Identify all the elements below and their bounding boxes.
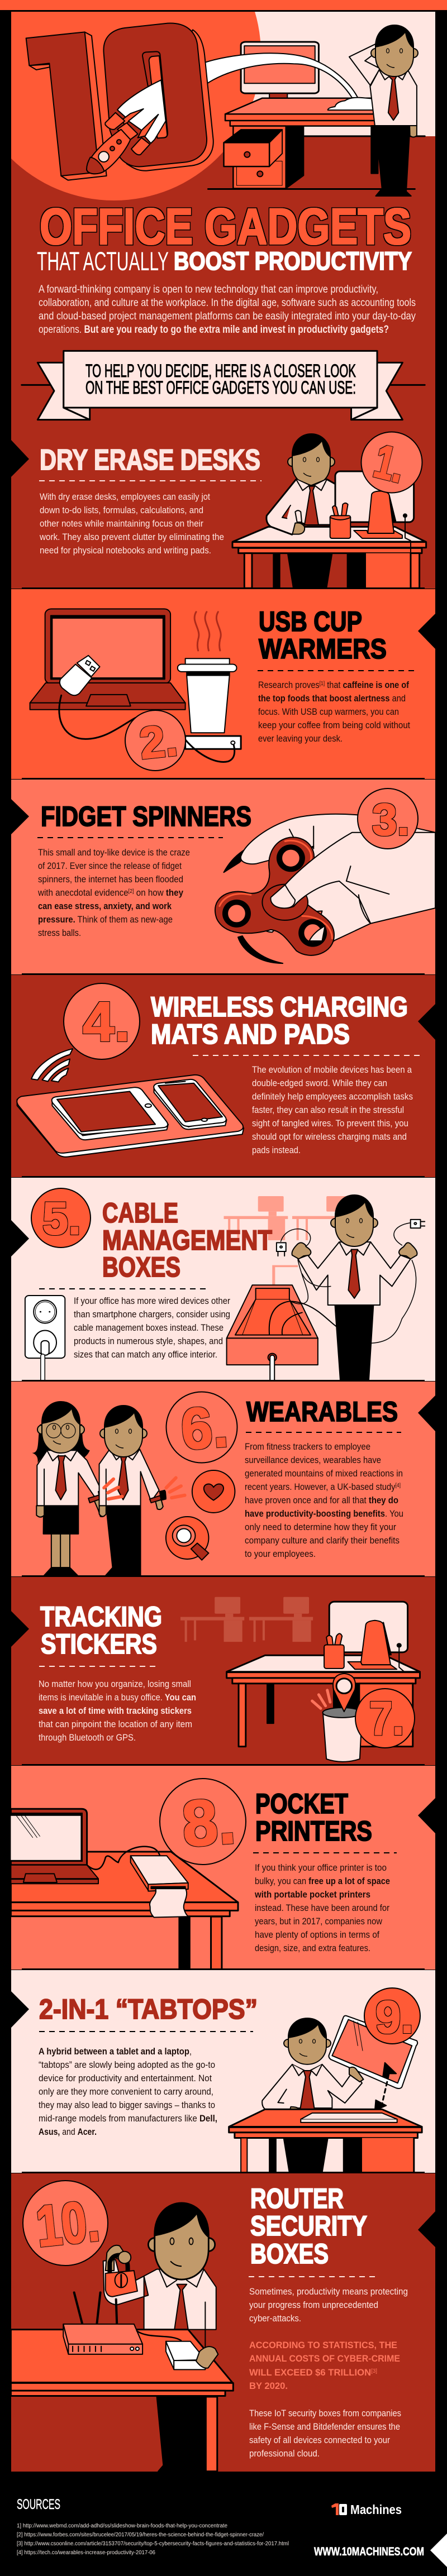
heading: dry erase desks: DRY ERASE DESKS: [40, 444, 260, 476]
panel: usb cup warmers: [11, 589, 435, 779]
banner: closer look: [22, 351, 425, 420]
number badge 5: [31, 1188, 91, 1248]
illustration: laptop with pocket printer on desk: [11, 1779, 246, 1970]
arrow: section 3 marker: [11, 799, 29, 834]
callout: cyber-crime statistic: [249, 2340, 400, 2391]
text: wearables: recent years. However, a UK-based study: [245, 1481, 420, 1492]
number badge 3: [358, 788, 418, 849]
text: tabtops: device for productivity and entertainment. Not: [39, 2073, 212, 2083]
text: wireless charging: pads instead.: [252, 1145, 301, 1155]
text: tabtops: A hybrid between a tablet and a laptop,: [39, 2046, 192, 2057]
source links: [4] https://tech.co/wearables-increase-productivity-2017-06: [17, 2550, 155, 2556]
text: dry erase desks: need for physical notebooks and writing pads.: [40, 545, 211, 556]
number badge 9: [364, 1988, 420, 2044]
heading: usb cup warmers: USB CUP: [259, 606, 362, 637]
illustration: desk with tracker pin on bin: [227, 1602, 420, 1762]
text: usb cup warmers: caffeine is one of: [343, 680, 409, 690]
text: wireless charging: [252, 1064, 413, 1155]
number badge 10: 10.: [33, 2188, 102, 2259]
text: fidget spinners: they: [166, 887, 183, 898]
panel: pocket printers: [11, 1766, 435, 1970]
text: cable management: sizes that can match any office interior.: [74, 1349, 217, 1360]
arrow: section 9 marker: [11, 1991, 29, 2028]
number badge 7: 7.: [369, 1692, 404, 1745]
heading: pocket printers: [255, 1788, 372, 1847]
text: tabtops: mid-range models from manufacturers like Dell,: [39, 2113, 217, 2124]
panel: wireless charging mats: [11, 975, 435, 1177]
number badge 1: 1.: [369, 434, 410, 493]
callout: cyber-crime statistic: ACCORDING TO STATISTICS, THE: [249, 2340, 397, 2350]
text: router intro: [249, 2286, 408, 2324]
text: wireless charging: faster, they can also result in the stressful: [252, 1105, 404, 1115]
number badge 6: 6.: [179, 1394, 230, 1462]
intro paragraph: A forward-thinking company is open to new technology that can improve productivity,: [39, 284, 378, 295]
number badge 7: [355, 1689, 415, 1748]
text: router closing: safety of all devices connected to your: [249, 2435, 390, 2445]
heading: wearables: WEARABLES: [246, 1396, 398, 1427]
heading: wireless charging mats and pads: [151, 991, 408, 1050]
separator line: [22, 778, 425, 780]
text: pocket printers: with portable pocket printers: [254, 1889, 370, 1900]
arrow: footer marker: [430, 2534, 447, 2567]
background office desks: [180, 1597, 313, 1642]
text: pocket printers: bulky, you can free up a lot of space: [255, 1876, 390, 1886]
text: wearables: to your employees.: [245, 1549, 316, 1559]
illustration: number ten with rocket: [26, 23, 213, 180]
text: pocket printers: design, size, and extra features.: [255, 1943, 370, 1953]
text: fidget spinners: [37, 847, 190, 938]
text: usb cup warmers: Research proves: [258, 680, 330, 690]
source links: [2] https://www.forbes.com/sites/brucelee/2017/05/19/heres-the-science-behind-the-fidget-spinner-craze/: [17, 2532, 264, 2538]
arrow: section 7 marker: [11, 1611, 29, 1647]
illustration: man with padlock and router: [11, 2181, 233, 2472]
background office desks: [224, 1196, 356, 1285]
heading: sources: SOURCES: [17, 2497, 60, 2512]
text: wearables: only need to determine how they fit your: [245, 1522, 396, 1532]
heading: tracking stickers: TRACKING: [40, 1601, 162, 1632]
callout: cyber-crime statistic: [3]: [371, 2368, 377, 2374]
separator line: [22, 1575, 425, 1577]
number badge 9: 9.: [375, 1992, 413, 2043]
heading: cable management boxes: CABLE: [102, 1197, 178, 1229]
heading: router security boxes: SECURITY: [250, 2210, 367, 2242]
text: pocket printers: have plenty of options in terms of: [255, 1929, 379, 1940]
number badge 4: 4.: [83, 991, 130, 1053]
arrow: section 8 marker: [418, 1798, 435, 1833]
text: fidget spinners: can ease stress, anxiety, and work: [38, 901, 172, 911]
text: dry erase desks: With dry erase desks, employees can easily jot: [40, 491, 210, 502]
intro paragraph: [39, 284, 416, 336]
arrow: section 2 marker: [418, 614, 435, 649]
text: pocket printers: years, but in 2017, companies now: [255, 1916, 383, 1927]
arrow: section 6 marker: [418, 1395, 435, 1431]
text: pocket printers: If you think your office printer is too: [255, 1862, 387, 1873]
logo: 10 Machines: [331, 2502, 402, 2517]
text: router closing: These IoT security boxes from companies: [249, 2408, 401, 2419]
illustration: wall socket with plug: [25, 1296, 110, 1412]
callout: cyber-crime statistic: ANNUAL COSTS OF CYBER-CRIME: [249, 2353, 400, 2364]
panel: fidget spinners: [11, 780, 435, 974]
number badge 5: 5.: [42, 1192, 81, 1244]
text: wearables: [245, 1441, 403, 1559]
text: tabtops: Asus, and Acer.: [39, 2126, 97, 2137]
heading: usb cup warmers: [259, 606, 387, 665]
text: dry erase desks: down to-do lists, formulas, calculations, and: [40, 505, 203, 515]
text: router intro: Sometimes, productivity means protecting: [249, 2286, 408, 2297]
woman head with glasses: [37, 1402, 84, 1453]
illustration: man with 2-in-1 tablet: [229, 1988, 422, 2173]
arrow: section 10 marker: [418, 2211, 435, 2247]
text: router closing: like F-Sense and Bitdefender ensures the: [249, 2421, 400, 2432]
text: wearables: generated mountains of mixed reactions in: [245, 1468, 403, 1479]
illustration: hand with fidget spinner: [215, 788, 435, 963]
arrow: section 1 marker: [11, 440, 29, 477]
text: wireless charging: double-edged sword. While they can: [252, 1078, 387, 1088]
text: pocket printers: [254, 1862, 390, 1953]
text: wireless charging: sight of tangled wires. To prevent this, you: [252, 1118, 408, 1129]
text: fidget spinners: stress balls.: [38, 928, 81, 938]
text: wearables: [4]: [395, 1483, 401, 1489]
intro paragraph: operations. But are you ready to go the extra mile and invest in productivity gadgets?: [39, 324, 389, 336]
illustration: woman and man with wearables: [32, 1402, 235, 1576]
text: fidget spinners: with anecdotal evidence: [38, 887, 139, 898]
text: tabtops: [39, 2046, 217, 2137]
heading: cable management boxes: [102, 1197, 272, 1283]
heading: 2-in-1 tabtops: 2-IN-1 “TABTOPS”: [39, 1994, 258, 2025]
callout: cyber-crime statistic: BY 2020.: [249, 2381, 288, 2391]
callout: cyber-crime statistic: WILL EXCEED $6 TRILLION: [249, 2367, 374, 2378]
text: usb cup warmers: that: [325, 680, 343, 690]
separator line: [22, 973, 425, 975]
office backdrop: [246, 12, 435, 136]
number badge 2: [125, 710, 186, 771]
separator line: [22, 587, 425, 589]
text: tabtops: “tabtops” are slowly being adopted as the go-to: [39, 2059, 215, 2070]
separator line: [22, 1968, 425, 1970]
separator line: [22, 2172, 425, 2173]
heading: router security boxes: ROUTER: [250, 2183, 344, 2214]
heading: cable management boxes: BOXES: [102, 1251, 180, 1283]
text: wireless charging: definitely help employees accomplish tasks: [252, 1091, 413, 1102]
number badge 3: 3.: [372, 795, 410, 844]
panel: cable management boxes: [11, 1178, 435, 1412]
heading: router security boxes: [250, 2183, 367, 2269]
text: cable management: If your office has more wired devices other: [74, 1296, 230, 1306]
text: fidget spinners: of 2017. Ever since the release of fidget: [38, 861, 182, 871]
text: router intro: cyber-attacks.: [249, 2313, 301, 2324]
text: tracking stickers: No matter how you organize, losing small: [39, 1679, 191, 1689]
text: tabtops: only are they more convenient to carry around,: [39, 2086, 213, 2097]
illustration: desk and monitor: [201, 42, 425, 189]
text: wearables: From fitness trackers to employee: [245, 1441, 370, 1452]
top band: [0, 0, 447, 10]
text: wireless charging: The evolution of mobile devices has been a: [252, 1064, 412, 1075]
number badge 4: [64, 983, 140, 1059]
text: wearables: company culture and clarify their benefits: [245, 1535, 400, 1546]
panel: wearables: [11, 1382, 435, 1576]
text: tracking stickers: save a lot of time with tracking stickers: [39, 1705, 192, 1716]
text: cable management: than smartphone chargers, consider using: [74, 1309, 230, 1320]
heading: tracking stickers: STICKERS: [41, 1628, 157, 1660]
number badge 8: [160, 1779, 246, 1865]
text: wearables: have productivity-boosting benefits. You: [245, 1508, 403, 1519]
text: fidget spinners: This small and toy-like device is the craze: [38, 847, 190, 858]
illustration: man holding cables over box: [227, 1195, 425, 1412]
heading: wireless charging mats and pads: MATS AND PADS: [151, 1019, 350, 1050]
heading: pocket printers: POCKET: [255, 1788, 348, 1819]
separator line: [22, 1380, 425, 1382]
illustration: man looking at rocket: [349, 25, 418, 196]
separator line: [22, 1176, 425, 1178]
text: fidget spinners: on how: [134, 887, 166, 898]
separator line: [22, 1764, 425, 1766]
text: wearables: surveillance devices, wearables have: [245, 1455, 381, 1465]
text: dry erase desks: work. They also prevent clutter by eliminating the: [39, 532, 224, 542]
text: tracking stickers: through Bluetooth or GPS.: [39, 1732, 136, 1743]
panel: tracking stickers: [11, 1577, 435, 1765]
text: usb cup warmers: [1]: [320, 681, 325, 687]
footer: sources: [17, 2497, 289, 2556]
arrow: section 5 marker: [11, 1220, 29, 1256]
text: dry erase desks: other notes while maintaining focus on their: [40, 518, 203, 529]
text: cable management: [74, 1296, 230, 1360]
text: fidget spinners: spinners, the internet has been flooded: [38, 874, 183, 885]
text: tracking stickers: [39, 1679, 196, 1743]
source links: 1] http://www.webmd.com/add-adhd/ss/slideshow-brain-foods-that-help-you-concentrate: [17, 2523, 227, 2529]
text: router intro: your progress from unprecedented: [249, 2300, 378, 2310]
text: tracking stickers: items is inevitable in a busy office. You can: [39, 1692, 196, 1703]
source links: [3] http://www.csoonline.com/article/3153707/security/top-5-cybersecurity-facts-figures-and-statistics-for-2017.html: [17, 2541, 289, 2547]
text: usb cup warmers: focus. With USB cup warmers, you can: [258, 706, 399, 717]
text: tabtops: they may also lead to bigger savings – thanks to: [39, 2100, 215, 2110]
illustration: laptop with usb stick and coffee cup: [30, 609, 241, 771]
text: usb cup warmers: keep your coffee from being cold without: [258, 720, 410, 730]
text: fidget spinners: [2]: [129, 888, 134, 895]
panel: router security boxes: [11, 2173, 435, 2472]
heading: usb cup warmers: WARMERS: [259, 633, 387, 665]
heading: cable management boxes: MANAGEMENT: [102, 1225, 272, 1256]
number badge 10: [23, 2181, 108, 2266]
text: wireless charging: should opt for wireless charging mats and: [252, 1131, 407, 1142]
text: dry erase desks: [39, 491, 224, 556]
text: usb cup warmers: [258, 680, 410, 744]
panel: header: [0, 0, 435, 589]
logo: 10 Machines: Machines: [350, 2502, 402, 2517]
text: cable management: products in numerous style, shapes, and: [74, 1336, 223, 1346]
text: usb cup warmers: ever leaving your desk.: [258, 733, 343, 744]
text: router closing: [249, 2408, 401, 2459]
number badge 8: 8.: [180, 1784, 238, 1860]
text: fidget spinners: pressure. Think of them as new-age: [38, 914, 173, 925]
panel: tabtops: [11, 1970, 435, 2173]
illustration: man at dry erase desk: [232, 432, 426, 588]
number badge 2: 2.: [137, 715, 180, 768]
text: wearables: have proven once and for all that they do: [245, 1495, 398, 1506]
text: cable management: cable management boxes instead. These: [74, 1322, 224, 1333]
arrow: section 4 marker: [418, 1004, 435, 1040]
heading: fidget spinners: FIDGET SPINNERS: [41, 801, 251, 832]
text: pocket printers: instead. These have been around for: [255, 1903, 389, 1913]
illustration: wireless charging mat: [17, 983, 244, 1157]
text: tracking stickers: that can pinpoint the location of any item: [39, 1719, 192, 1729]
heading: router security boxes: BOXES: [250, 2238, 329, 2269]
source links: [17, 2523, 289, 2556]
backdrop circle: [11, 12, 260, 200]
text: usb cup warmers: the top foods that boost alertness and: [258, 693, 406, 704]
text: router closing: professional cloud.: [249, 2448, 320, 2459]
subtitle: that actually: THAT ACTUALLY: [37, 246, 169, 276]
heading: pocket printers: PRINTERS: [255, 1815, 372, 1847]
heading: tracking stickers: [40, 1601, 162, 1660]
